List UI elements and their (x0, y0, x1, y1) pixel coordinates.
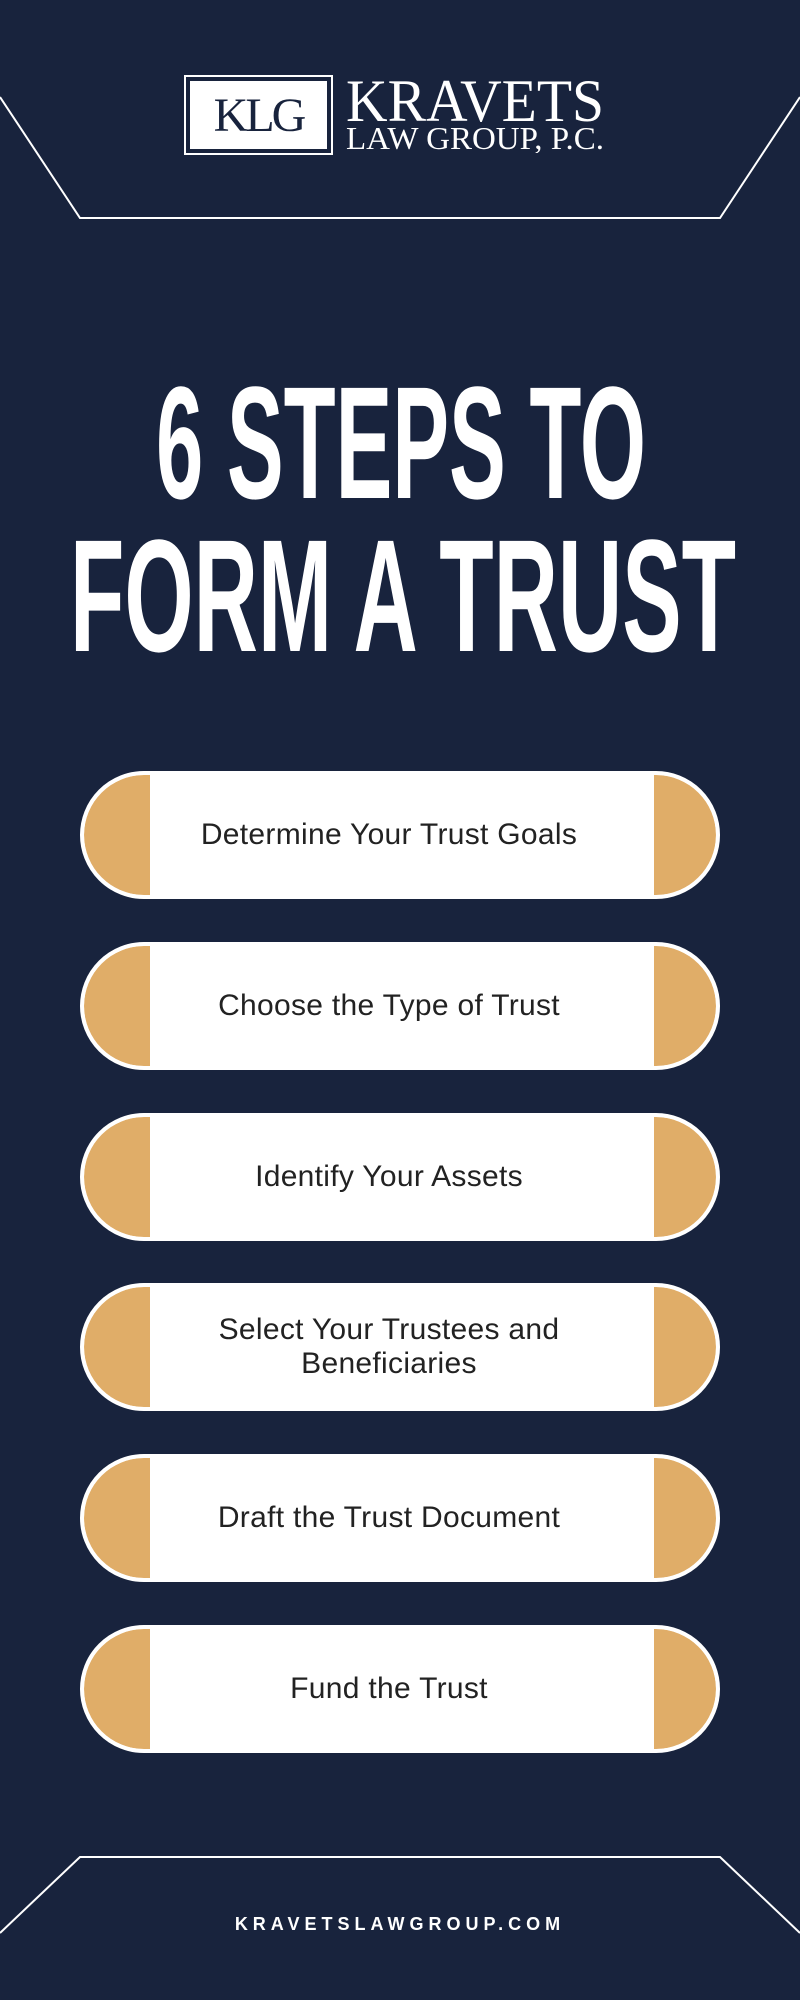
step 5: Draft the Trust Document (218, 1501, 560, 1534)
step 1: Determine Your Trust Goals (201, 818, 577, 851)
step 4: Select Your Trustees and (219, 1312, 559, 1346)
step 1 (80, 771, 720, 899)
step 2 (80, 942, 720, 1070)
step 3: Identify Your Assets (255, 1160, 523, 1193)
step 5 (80, 1454, 720, 1582)
step 6 (80, 1625, 720, 1753)
step 4 (80, 1283, 720, 1411)
footer url: KRAVETSLAWGROUP.COM (235, 1914, 565, 1934)
logo mark box: KLG (214, 88, 303, 142)
step 3 (80, 1113, 720, 1241)
step 2: Choose the Type of Trust (218, 989, 560, 1022)
title (70, 360, 736, 670)
step 6: Fund the Trust (290, 1672, 488, 1705)
logo (184, 75, 604, 155)
step 4: Beneficiaries (301, 1347, 477, 1380)
logo mark box (188, 79, 329, 151)
